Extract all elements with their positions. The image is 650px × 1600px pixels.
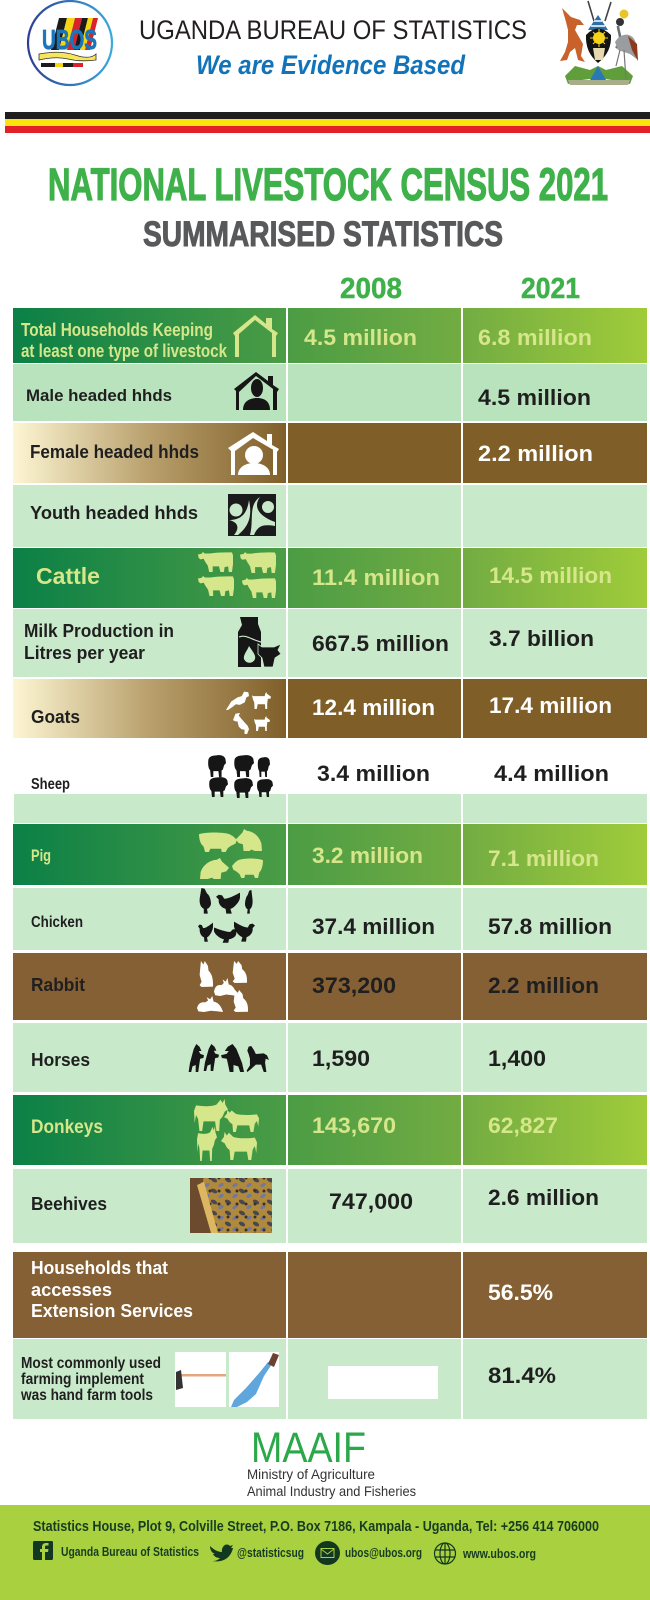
row: cattle: 14.5 million — [489, 563, 612, 588]
row: farming implements — [13, 1339, 647, 1419]
row: goats — [13, 679, 647, 738]
row: cattle — [13, 548, 647, 608]
icon: twitter — [210, 1545, 233, 1561]
flag stripes — [5, 112, 650, 133]
row: total households: Total Households Keeping — [21, 320, 213, 340]
row: milk production: 3.7 billion — [489, 626, 594, 651]
column header: 2008: 2008 — [340, 273, 402, 305]
row: total households: at least one type of livestock — [21, 341, 228, 361]
header: slogan: We are Evidence Based — [196, 50, 465, 80]
row: male headed households: Male headed hhds — [26, 386, 172, 405]
row: extension services: accesses — [31, 1280, 112, 1300]
image: hoe — [175, 1352, 226, 1407]
logo: UBOS: UBOS — [42, 24, 97, 55]
row: donkeys: 62,827 — [488, 1113, 558, 1138]
row: pig: 7.1 million — [488, 846, 599, 871]
footer email: ubos@ubos.org — [345, 1545, 422, 1560]
logo: MAAIF: MAAIF — [251, 1424, 366, 1472]
row: female headed households — [13, 423, 647, 483]
row: horses: 1,590 — [312, 1046, 370, 1071]
row: chicken: Chicken — [31, 914, 83, 931]
footer website: www.ubos.org — [462, 1546, 536, 1561]
subtitle: SUMMARISED STATISTICS — [143, 215, 503, 254]
row: horses: Horses — [31, 1050, 90, 1070]
row: rabbit: 2.2 million — [488, 973, 599, 998]
icon: six sheep — [208, 755, 273, 798]
icon: five rabbits — [197, 961, 248, 1012]
row: goats: 17.4 million — [489, 693, 612, 718]
row: donkeys: Donkeys — [31, 1117, 103, 1138]
icon: coat of arms — [560, 1, 638, 85]
row: chicken — [13, 888, 647, 950]
blank value box — [328, 1366, 438, 1399]
row: extension services — [13, 1252, 647, 1338]
row: sheep — [14, 755, 647, 823]
row: milk production: Litres per year — [24, 643, 145, 663]
row: pig — [13, 824, 647, 885]
column header: 2021: 2021 — [521, 273, 580, 305]
row: pig: 3.2 million — [312, 843, 423, 868]
icon: milk bottle and cow — [238, 617, 281, 667]
row: horses — [13, 1023, 647, 1092]
row: extension services: 56.5% — [488, 1280, 553, 1305]
row: milk production: 667.5 million — [312, 631, 449, 656]
row: horses: 1,400 — [488, 1046, 546, 1071]
image: bees on honeycomb — [190, 1178, 272, 1233]
icon: four cows — [198, 552, 276, 598]
row: farming implements: Most commonly used — [21, 1355, 161, 1372]
row: pig: Pig — [31, 846, 51, 865]
row: cattle: Cattle — [36, 563, 100, 589]
row: donkeys — [13, 1095, 647, 1165]
icon: facebook — [33, 1541, 53, 1560]
row: milk production: Milk Production in — [24, 621, 174, 641]
icon: house with man — [234, 372, 279, 410]
footer twitter handle: @statisticsug — [237, 1545, 304, 1560]
row: rabbit: 373,200 — [312, 973, 396, 998]
logo: MAAIF: Animal Industry and Fisheries — [247, 1483, 416, 1499]
row: beehives — [13, 1169, 647, 1243]
row: beehives: 2.6 million — [488, 1185, 599, 1210]
icon: youth figures — [228, 494, 276, 536]
footer — [0, 1505, 650, 1600]
row: cattle: 11.4 million — [312, 565, 440, 590]
icon: house with woman — [228, 432, 279, 475]
row: total households — [13, 308, 647, 363]
image: panga — [229, 1352, 279, 1407]
icon: four horses — [189, 1044, 269, 1072]
row: extension services: Households that — [31, 1258, 168, 1278]
row: beehives: Beehives — [31, 1194, 107, 1214]
row: extension services: Extension Services — [31, 1301, 193, 1321]
icon: four donkeys — [194, 1099, 259, 1161]
row: farming implements: farming implement — [21, 1371, 145, 1388]
row: goats: 12.4 million — [312, 695, 435, 720]
icon: four pigs — [199, 829, 263, 879]
row: sheep: Sheep — [31, 776, 70, 793]
footer facebook name: Uganda Bureau of Statistics — [61, 1544, 199, 1559]
icon: email — [315, 1541, 340, 1565]
header: organisation name: UGANDA BUREAU OF STATISTICS — [139, 15, 527, 45]
row: sheep: 3.4 million — [317, 761, 430, 786]
row: chicken: 57.8 million — [488, 914, 612, 939]
row: total households: 4.5 million — [304, 325, 417, 350]
row: rabbit: Rabbit — [31, 975, 85, 995]
icon: house outline — [233, 315, 278, 357]
row: male headed households — [13, 364, 647, 421]
logo: UBOS — [28, 1, 112, 85]
row: milk production — [13, 609, 647, 677]
logo: MAAIF — [247, 1424, 416, 1499]
row: youth headed households: Youth headed hhds — [30, 503, 198, 523]
row: donkeys: 143,670 — [312, 1113, 396, 1138]
row: farming implements: was hand farm tools — [20, 1387, 153, 1404]
icon: four goats — [226, 692, 271, 734]
row: male headed households: 4.5 million — [478, 385, 591, 410]
icon: six chickens — [198, 888, 255, 943]
row: youth headed households — [13, 485, 647, 547]
row: beehives: 747,000 — [329, 1189, 413, 1214]
row: farming implements: 81.4% — [488, 1363, 556, 1388]
row: rabbit — [13, 953, 647, 1020]
row: total households: 6.8 million — [478, 325, 592, 350]
row: female headed households: Female headed hhds — [30, 442, 199, 462]
icon: globe — [434, 1543, 456, 1564]
row: goats: Goats — [31, 707, 80, 727]
logo: MAAIF: Ministry of Agriculture — [247, 1466, 375, 1482]
row: female headed households: 2.2 million — [478, 441, 593, 466]
row: sheep: 4.4 million — [494, 761, 609, 786]
row: chicken: 37.4 million — [312, 914, 435, 939]
